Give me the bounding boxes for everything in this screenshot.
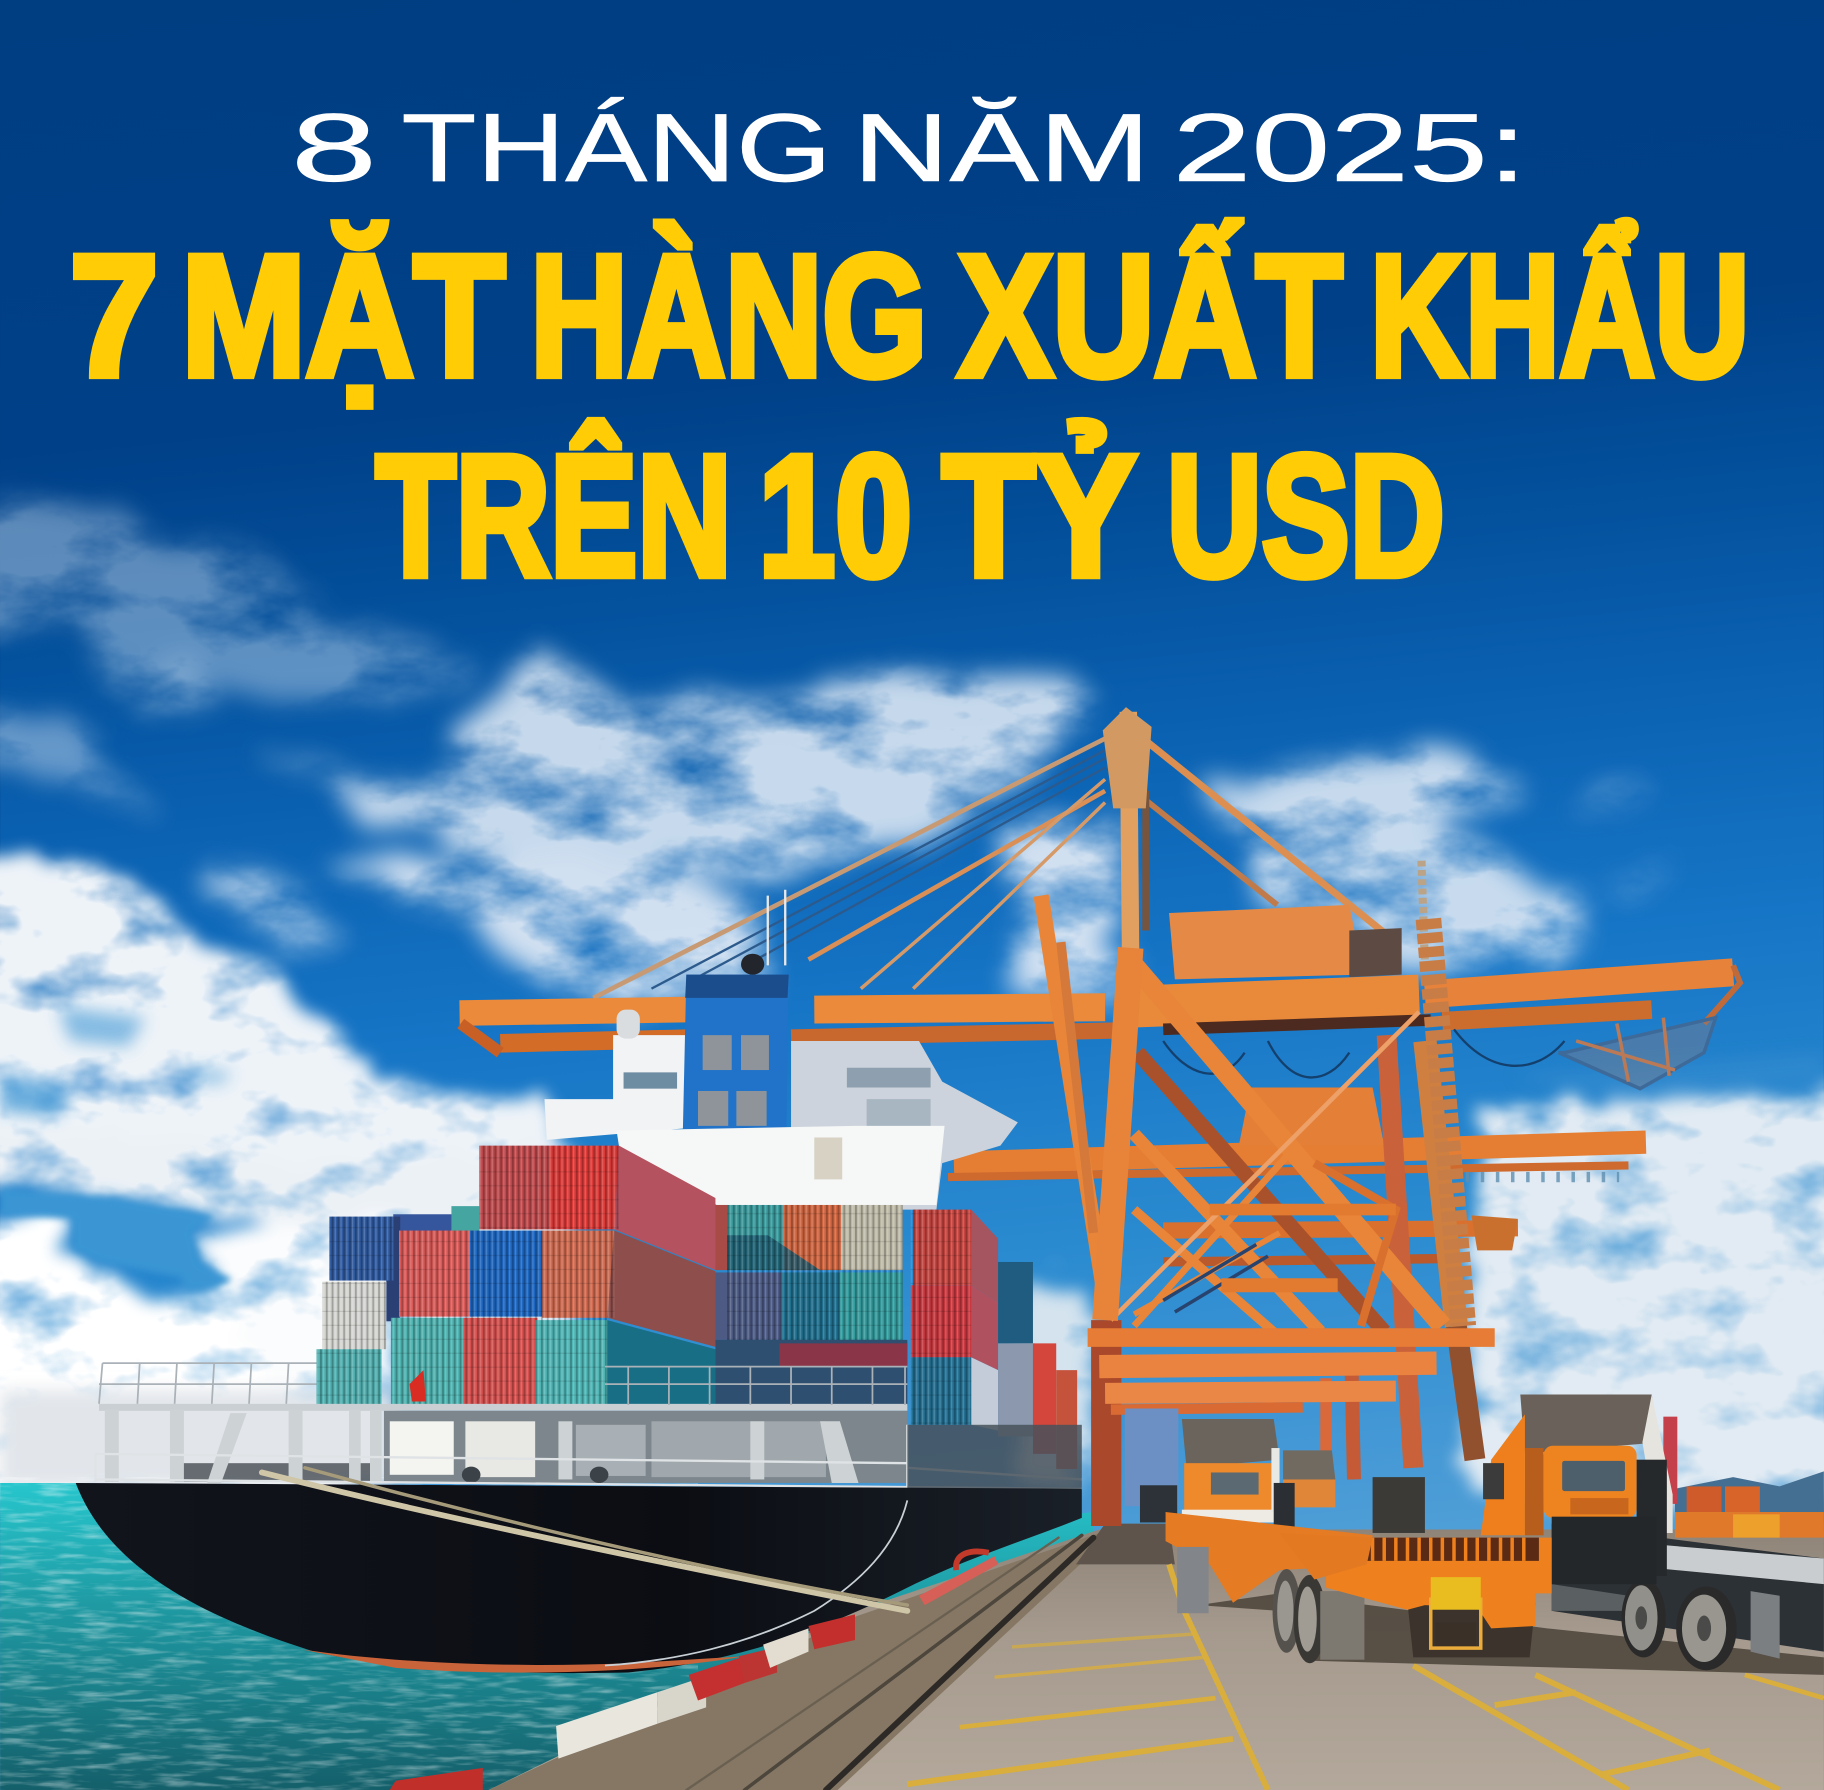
truck wheels — [1621, 1578, 1780, 1670]
title line 2: XUẤT — [959, 220, 1342, 412]
title line 3: 10 — [758, 420, 912, 612]
main leg — [1105, 948, 1131, 1320]
low cumulus clouds — [0, 843, 1824, 1500]
main beam — [460, 965, 1740, 1053]
second truck — [1182, 1419, 1295, 1529]
main truck — [1273, 1395, 1824, 1670]
crane — [460, 707, 1740, 1526]
mooring cable — [605, 1500, 907, 1666]
high wispy clouds — [0, 500, 1658, 1024]
anti-fouling stripe — [300, 1649, 745, 1673]
title line 3 — [376, 420, 1445, 612]
grey aft structure — [791, 1041, 1018, 1210]
deck equipment — [175, 1463, 608, 1483]
corrugation overlay — [316, 1146, 971, 1425]
title — [70, 95, 1749, 612]
cab — [1481, 1395, 1673, 1576]
ground: quay — [489, 1524, 1824, 1790]
blue tower — [683, 975, 789, 1131]
yellow lane markings — [907, 1564, 1824, 1790]
distant mountains — [1675, 1471, 1824, 1524]
container ship superstructure — [544, 954, 1018, 1210]
red flag — [410, 1370, 426, 1402]
pale horizon haze — [0, 1390, 396, 1489]
deck pillars — [105, 1410, 858, 1483]
title line 3: USD — [1167, 420, 1445, 612]
third truck — [1283, 1450, 1335, 1507]
title line 3: TỶ — [942, 420, 1136, 612]
diagonal braces — [1041, 896, 1442, 1332]
midship containers — [715, 1205, 907, 1405]
far right trailers — [1663, 1417, 1824, 1538]
sea — [0, 1483, 1093, 1790]
trailer — [1280, 1533, 1552, 1628]
tractor connection — [1552, 1517, 1656, 1584]
far trucks — [1125, 1409, 1824, 1613]
rear crane boom — [948, 1087, 1646, 1262]
base frame — [1088, 1338, 1495, 1410]
container stacks — [316, 1146, 1077, 1469]
ship deck railing — [96, 1363, 1082, 1495]
tower lattice — [1421, 861, 1463, 1326]
ship hull — [76, 1468, 1082, 1673]
title line 1: 8 — [291, 95, 377, 202]
white block — [617, 1126, 945, 1205]
track rails — [686, 1535, 1093, 1790]
title line 1 — [291, 95, 1527, 202]
forward containers — [911, 1210, 1077, 1469]
truck chassis — [1552, 1524, 1824, 1652]
quay curb blocks — [390, 1552, 998, 1790]
crane cables — [593, 739, 1105, 998]
far trailer — [1166, 1512, 1373, 1613]
blue sky gaps — [0, 1006, 1824, 1291]
upper railing — [99, 1363, 907, 1405]
title line 1: NĂM — [853, 95, 1150, 202]
title line 2: 7 — [70, 220, 158, 412]
trailer wheels — [1273, 1569, 1364, 1663]
container side faces — [607, 1146, 715, 1405]
title line 2: MẶT — [182, 220, 505, 412]
white bridge — [544, 1035, 686, 1140]
trailer under gear — [1407, 1603, 1535, 1657]
title line 1: THÁNG — [401, 95, 832, 202]
title line 3: TRÊN — [376, 420, 732, 612]
title line 2 — [70, 220, 1749, 412]
tower windows — [698, 1035, 769, 1126]
ship mast — [768, 890, 785, 965]
crane mast and stays — [1103, 707, 1396, 965]
trolley under boom — [1163, 1018, 1716, 1089]
title line 1: 2025: — [1173, 95, 1527, 202]
lower legs — [1106, 1035, 1475, 1526]
machinery house — [1169, 905, 1402, 979]
lower railing — [96, 1425, 1082, 1495]
title line 2: HÀNG — [531, 220, 927, 412]
truck shadow — [1198, 1593, 1824, 1675]
mooring rope — [262, 1468, 907, 1611]
rear ladder — [1431, 1577, 1481, 1648]
